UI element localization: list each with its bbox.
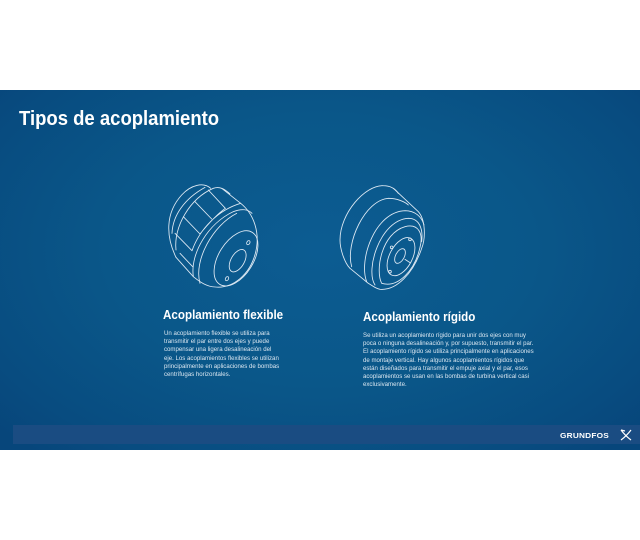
text: flexible coupling: eje. Los acoplamientos flexibles se utilizan (164, 355, 279, 362)
text: flexible coupling: transmitir el par entre dos ejes y puede (164, 338, 269, 345)
icon: rigid coupling (340, 185, 425, 290)
text: rigid coupling: exclusivamente. (363, 381, 407, 388)
footer bar (13, 425, 640, 444)
text: rigid coupling: El acoplamiento rígido se utiliza principalmente en aplicaciones (363, 348, 534, 355)
title: Tipos de acoplamiento (19, 108, 219, 130)
text: rigid coupling: de montaje vertical. Hay algunos acoplamientos rígidos que (363, 357, 524, 364)
text: flexible coupling: Un acoplamiento flexible se utiliza para (164, 330, 270, 337)
text: flexible coupling: principalmente en aplicaciones de bombas (164, 363, 279, 370)
text: flexible coupling (164, 330, 279, 378)
text: rigid coupling (363, 332, 534, 388)
logo wordmark: GRUNDFOS (560, 431, 609, 440)
text: rigid coupling: Se utiliza un acoplamiento rígido para unir dos ejes con muy (363, 332, 526, 339)
heading: flexible coupling: Acoplamiento flexible (163, 308, 283, 322)
logo: Grundfos (560, 429, 632, 440)
text: rigid coupling: están diseñados para transmitir el empuje axial y el par, esos (363, 365, 528, 372)
text: flexible coupling: centrífugas horizontales. (164, 371, 230, 378)
text: flexible coupling: compensar una ligera desalineación del (164, 346, 271, 353)
icon: flexible coupling (168, 184, 258, 288)
text: rigid coupling: poca o ninguna desalineación y, por supuesto, transmitir el par. (363, 340, 533, 347)
heading: rigid coupling: Acoplamiento rígido (363, 310, 475, 324)
panel: blueprint background (0, 90, 640, 450)
logo mark (620, 429, 632, 440)
text: rigid coupling: acoplamientos se usan en las bombas de turbina vertical casi (363, 373, 529, 380)
